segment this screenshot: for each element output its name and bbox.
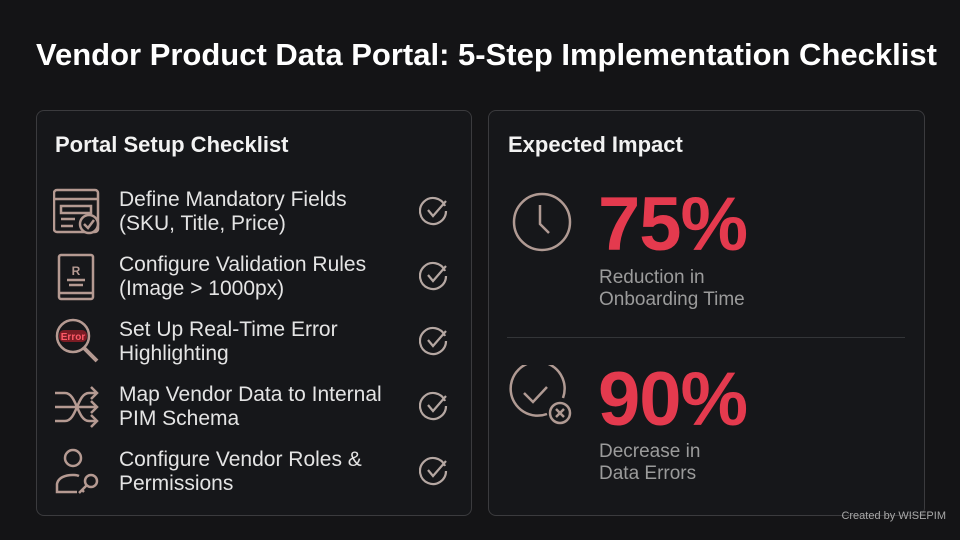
panel: expected impact: [488, 110, 925, 516]
text: decrease in data errors: [599, 441, 700, 484]
icon: error magnifier: [56, 318, 98, 362]
icon: clock: [512, 192, 572, 252]
row 2: Configure Validation Rules: [119, 253, 366, 276]
row 5: Permissions: [119, 472, 233, 495]
row 4: Map Vendor Data to Internal: [119, 383, 382, 406]
heading: portal setup checklist: Portal Setup Checklist: [55, 132, 289, 157]
text: reduction in onboarding time: Onboarding Time: [599, 289, 745, 310]
row 2: [58, 253, 448, 300]
row 4: [55, 383, 448, 430]
row 3: Highlighting: [119, 342, 229, 365]
row 2: (Image > 1000px): [119, 277, 284, 300]
row 4: PIM Schema: [119, 407, 239, 430]
row 1: Define Mandatory Fields: [119, 188, 347, 211]
icon: shuffle arrows: [55, 386, 99, 428]
text: reduction in onboarding time: [599, 267, 745, 310]
text: decrease in data errors: Data Errors: [599, 463, 696, 484]
icon: check: [419, 326, 448, 356]
heading: expected impact: Expected Impact: [508, 132, 683, 157]
icon: check: [419, 196, 448, 226]
row 1: (SKU, Title, Price): [119, 212, 286, 235]
text: decrease in data errors: Decrease in: [599, 441, 700, 462]
panel: portal setup checklist: [36, 110, 472, 516]
icon: form: [53, 188, 100, 234]
icon: user key: [56, 448, 98, 494]
title: Vendor Product Data Portal: 5-Step Implementation Checklist: [36, 37, 937, 72]
icon: error magnifier: Error: [61, 332, 85, 343]
row 5: [56, 448, 448, 495]
icon: rule book: R: [72, 264, 81, 278]
icon: check: [419, 456, 448, 486]
icon: check: [419, 392, 448, 420]
row 3: Set Up Real-Time Error: [119, 318, 338, 341]
stat: 75%: 75%: [598, 182, 747, 267]
footer credit: Created by WISEPIM: [841, 510, 946, 522]
icon: check with x: [509, 365, 572, 424]
row 3: [56, 318, 448, 365]
icon: rule book: [58, 254, 94, 300]
stat: 90%: 90%: [598, 357, 747, 442]
row 1: [53, 188, 448, 235]
row 5: Configure Vendor Roles &: [119, 448, 362, 471]
text: reduction in onboarding time: Reduction in: [599, 267, 705, 288]
icon: check: [419, 262, 448, 290]
